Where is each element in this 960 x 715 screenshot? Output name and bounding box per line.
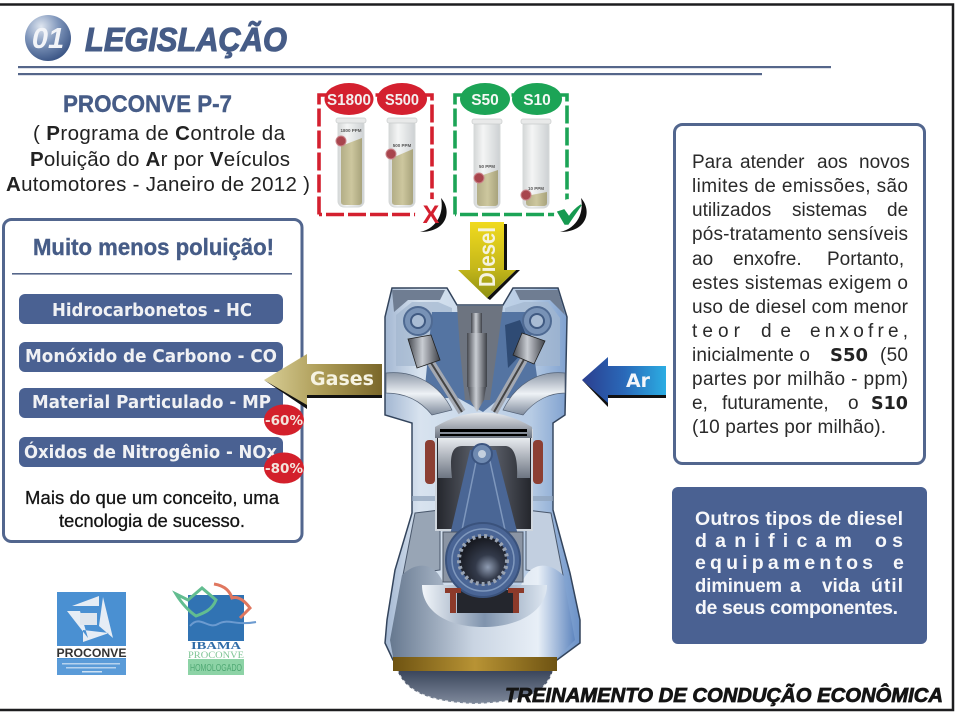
- logo: IBAMA PROCONVE homologado: [176, 584, 256, 675]
- text block: pós-tratamento explanation: o: [848, 393, 859, 414]
- icon: red X reject mark: [415, 198, 447, 232]
- text block: pós-tratamento explanation: de: [887, 200, 908, 221]
- pill: monóxido de carbono: Monóxido de Carbono - CO: [25, 346, 277, 367]
- arrow: gases: [264, 354, 382, 409]
- arrow: ar: Ar: [626, 370, 651, 392]
- text block: pós-tratamento explanation: Para: [692, 152, 733, 173]
- test tube: 10 ppm: 10 PPM: [528, 186, 544, 191]
- icon: red X reject mark: X: [423, 201, 440, 229]
- text block: outros tipos de diesel: equipamentos: [695, 552, 873, 574]
- pill: óxidos de nitrogênio: [19, 437, 283, 467]
- pill: material particulado: [19, 388, 283, 418]
- logo: PROCONVE: [56, 592, 126, 675]
- text block: outros tipos de diesel: diminuem: [695, 575, 782, 597]
- text block: pós-tratamento explanation: S10: [871, 394, 908, 414]
- panel: warning: [672, 487, 927, 644]
- panel: high sulphur diesel S1800 S500: [319, 83, 432, 214]
- icon: number badge 01: [25, 15, 71, 61]
- logo: IBAMA PROCONVE homologado: PROCONVE: [188, 651, 244, 661]
- text block: pós-tratamento explanation: [692, 152, 910, 438]
- text block: pós-tratamento explanation: sistemas: [792, 200, 867, 221]
- text block: pós-tratamento explanation: Portanto,: [827, 249, 904, 270]
- text block: outros tipos de diesel: vida: [822, 575, 860, 597]
- panel: explanation text: [674, 124, 924, 464]
- text block: pós-tratamento explanation: e,: [692, 393, 708, 414]
- text: mais do que um conceito: tecnologia de sucesso.: [59, 510, 245, 531]
- pill: hidrocarbonetos: Hidrocarbonetos - HC: [52, 300, 252, 321]
- text block: pós-tratamento explanation: aos: [817, 152, 848, 173]
- text block: pós-tratamento explanation: atender: [740, 152, 805, 173]
- text block: outros tipos de diesel: a: [790, 575, 801, 597]
- text block: pós-tratamento explanation: futuramente,: [722, 393, 829, 414]
- arrow: gases: Gases: [310, 368, 374, 390]
- icon: number badge 01: 01: [32, 23, 64, 55]
- panel: emissions: [4, 220, 304, 542]
- logo: IBAMA PROCONVE homologado: HOMOLOGADO: [190, 663, 242, 674]
- text block: pós-tratamento explanation: enxofre.: [733, 249, 802, 270]
- heading: muito menos poluição: Muito menos poluição!: [33, 234, 274, 260]
- text block: pós-tratamento explanation: (10 partes por milhão).: [692, 417, 886, 438]
- text block: outros tipos de diesel: e: [893, 552, 904, 574]
- label: S50: S50: [471, 92, 499, 109]
- label: S1800: S1800: [327, 92, 371, 109]
- logo: IBAMA PROCONVE homologado: IBAMA: [191, 640, 241, 652]
- text block: pós-tratamento explanation: estes sistemas exigem o: [692, 273, 908, 294]
- heading: PROCONVE P-7: PROCONVE P-7: [63, 91, 232, 118]
- text block: pós-tratamento explanation: ao: [692, 249, 713, 270]
- text block: pós-tratamento explanation: inicialmente o: [692, 345, 810, 366]
- arrow: ar: [582, 357, 666, 407]
- text block: outros tipos de diesel: os: [875, 530, 903, 552]
- text block: pós-tratamento explanation: S50: [830, 346, 868, 366]
- text block: pós-tratamento explanation: partes por milhão - ppm): [692, 369, 908, 390]
- text block: pós-tratamento explanation: enxofre,: [810, 321, 908, 342]
- text block: pós-tratamento explanation: novos: [859, 152, 910, 173]
- pill: monóxido de carbono: [19, 342, 283, 372]
- text block: programa description: Automotores - Janeiro de 2012 ): [6, 173, 310, 196]
- label: S10: S10: [523, 92, 551, 109]
- badge: -60%: [264, 404, 304, 436]
- text block: outros tipos de diesel: danificam: [695, 530, 852, 552]
- label: S500: S500: [385, 92, 419, 109]
- arrow: diesel: [458, 222, 520, 300]
- text block: pós-tratamento explanation: de: [761, 321, 791, 342]
- text block: pós-tratamento explanation: (50: [880, 345, 908, 366]
- pill: material particulado: Material Particulado - MP: [32, 392, 271, 413]
- text block: pós-tratamento explanation: uso de diesel com menor: [692, 297, 909, 318]
- badge: -60%: -60%: [265, 414, 303, 429]
- heading: legislação: LEGISLAÇÃO: [85, 21, 287, 58]
- text block: programa description: [6, 122, 310, 196]
- text block: pós-tratamento explanation: pós-tratamento sensíveis: [692, 224, 908, 245]
- text block: outros tipos de diesel: útil: [871, 575, 903, 597]
- engine illustration: [385, 288, 580, 704]
- arrow: diesel: Diesel: [474, 227, 500, 287]
- text: mais do que um conceito: Mais do que um conceito, uma: [25, 487, 280, 508]
- text block: programa description: ( Programa de Controle da: [33, 122, 286, 145]
- badge: -80%: [264, 452, 304, 484]
- icon: green check mark: [554, 198, 587, 232]
- test tube: 500 ppm: 500 PPM: [393, 143, 412, 148]
- text block: outros tipos de diesel: de seus componentes.: [695, 597, 898, 619]
- badge: -80%: -80%: [265, 462, 303, 477]
- section header: [18, 15, 831, 75]
- text block: outros tipos de diesel: [695, 508, 904, 619]
- text: mais do que um conceito: [25, 487, 280, 531]
- panel: low sulphur diesel S50 S10: [455, 83, 567, 214]
- test tube: 50 ppm: 50 PPM: [479, 164, 495, 169]
- text block: outros tipos de diesel: Outros tipos de diesel: [695, 508, 903, 530]
- test tube: 1800 ppm: 1800 PPM: [340, 128, 362, 133]
- text block: pós-tratamento explanation: teor: [692, 321, 741, 342]
- pill: óxidos de nitrogênio: Óxidos de Nitrogênio - NOx: [24, 441, 277, 463]
- footer title: TREINAMENTO DE CONDUÇÃO ECONÔMICA: [505, 683, 943, 707]
- text block: pós-tratamento explanation: utilizados: [692, 200, 771, 221]
- text block: pós-tratamento explanation: limites de emissões, são: [692, 176, 908, 197]
- pill: hidrocarbonetos: [19, 294, 283, 324]
- logo: PROCONVE: PROCONVE: [56, 646, 126, 660]
- text block: programa description: Poluição do Ar por Veículos: [30, 148, 290, 171]
